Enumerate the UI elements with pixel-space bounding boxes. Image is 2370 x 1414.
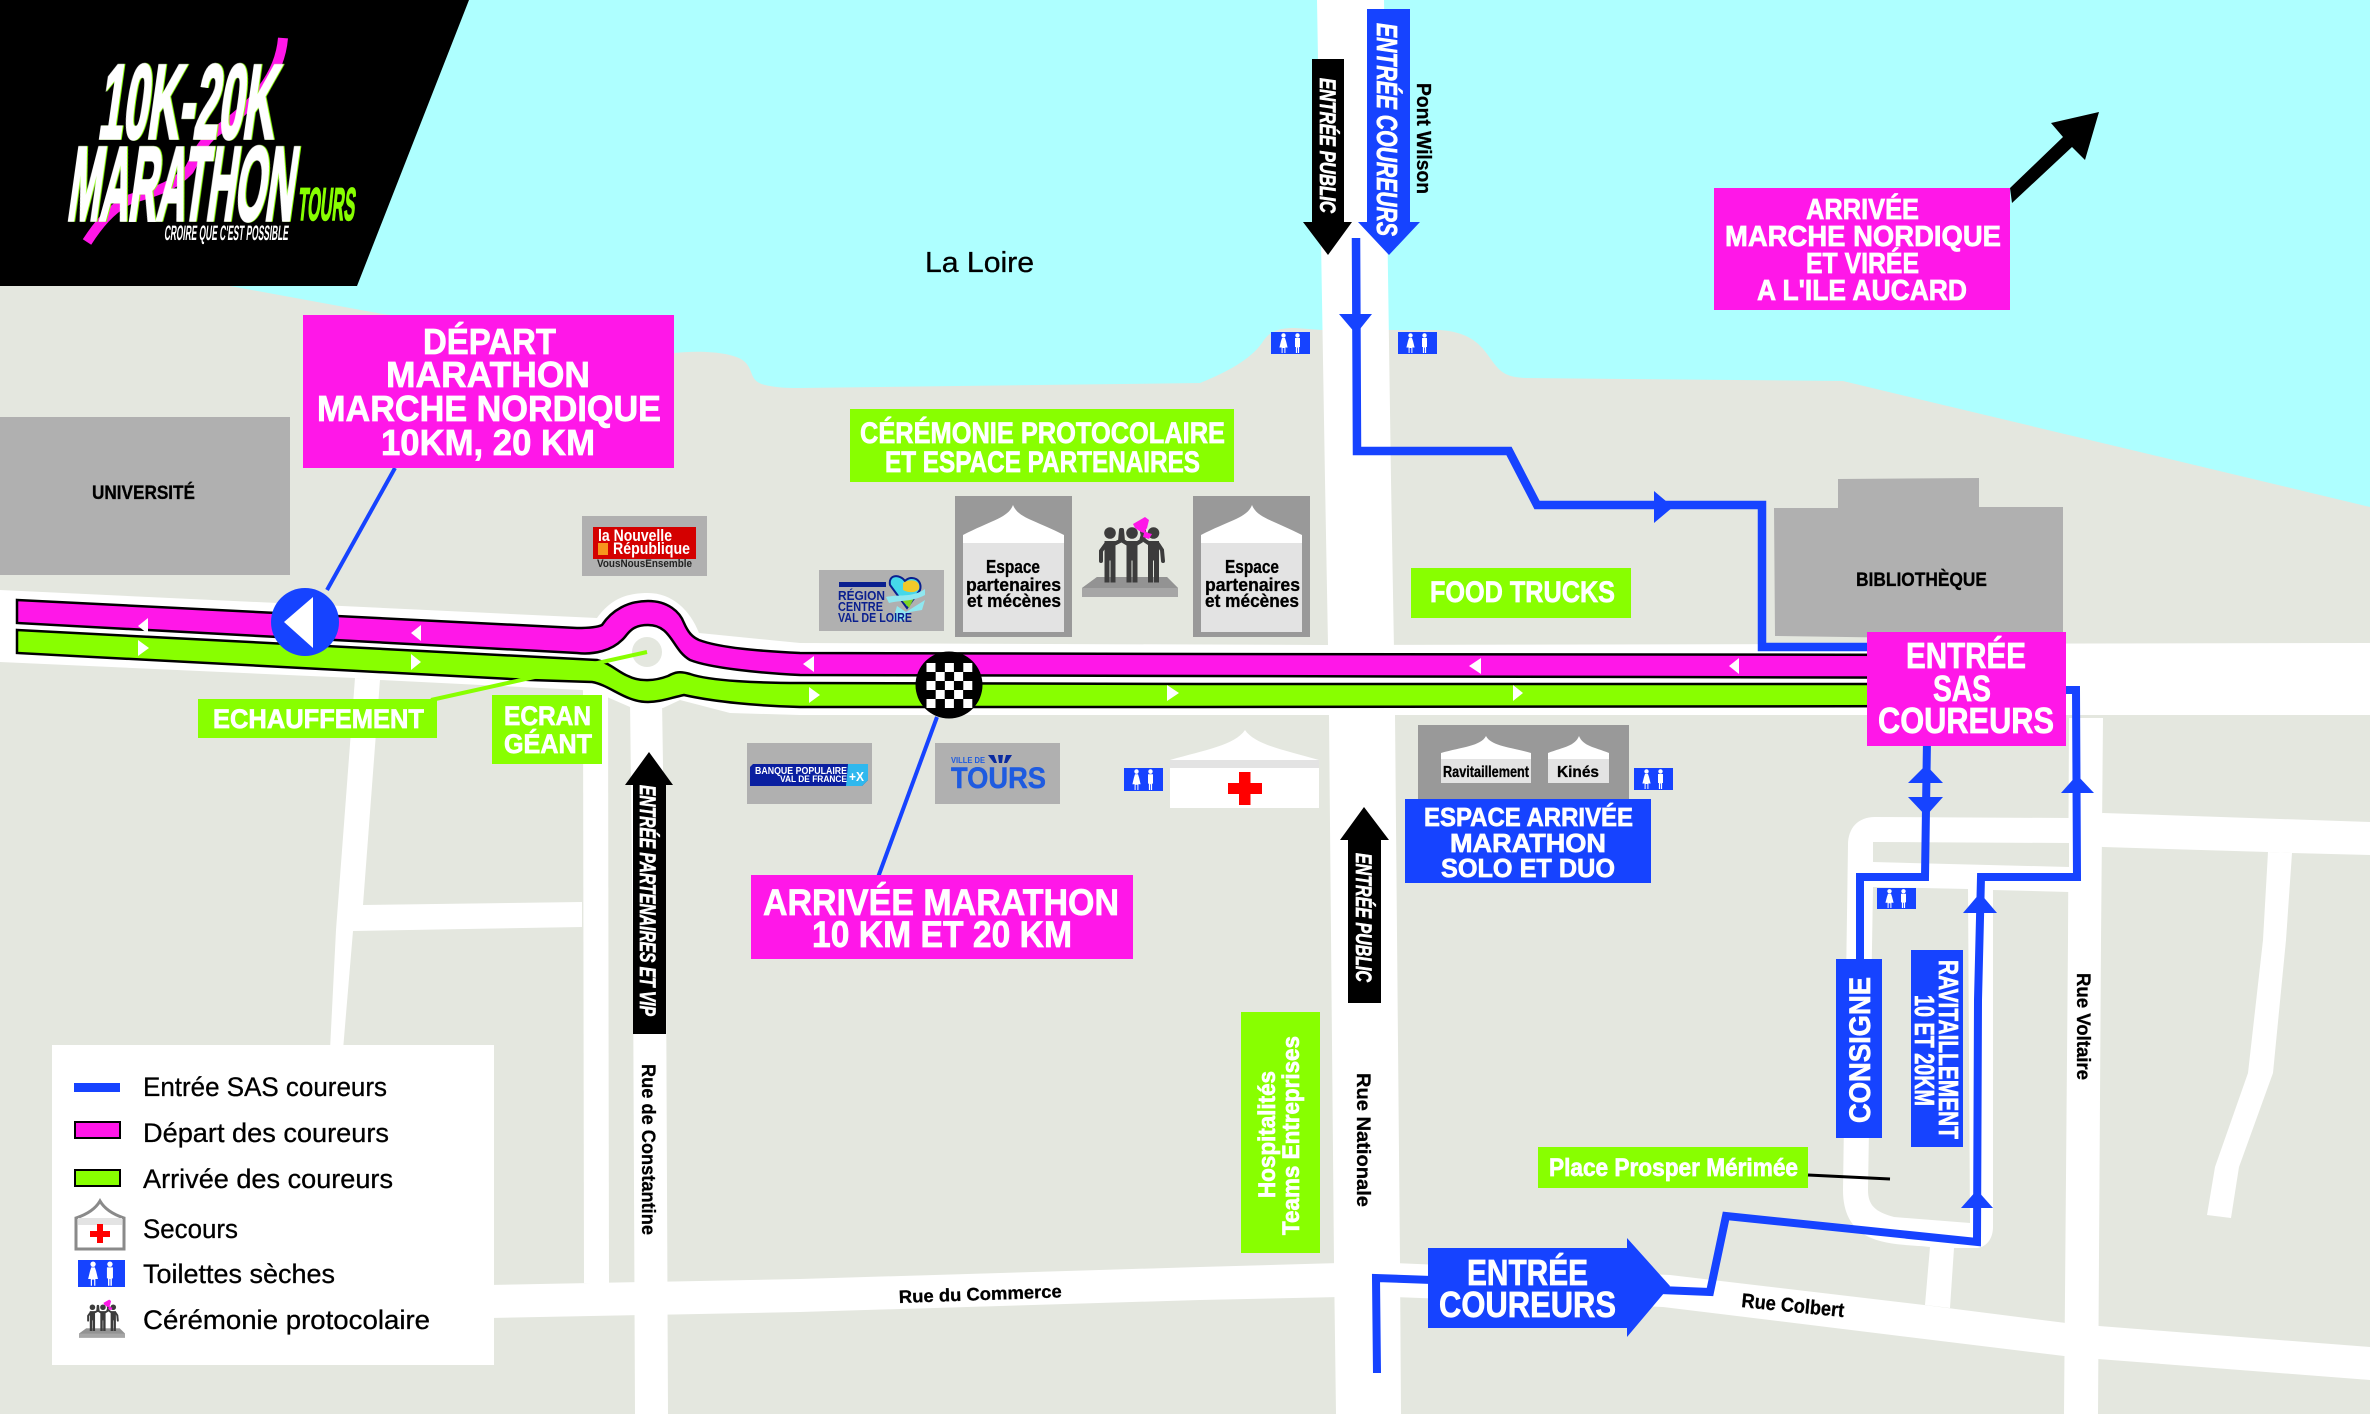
tents: ravitaillement and kinés: Ravitaillement <box>1443 764 1530 781</box>
roundabout island <box>632 637 662 667</box>
arrow: entrée coureurs from bridge: ENTRÉE COUREURS <box>1370 23 1403 236</box>
label: hospitalités: Hospitalités <box>1254 1071 1281 1198</box>
label: écran géant: GÉANT <box>504 728 592 759</box>
toilets: square <box>1877 888 1916 909</box>
label: La Loire: La Loire <box>925 247 1034 279</box>
legend icon: secours <box>76 1201 124 1249</box>
label: food trucks: FOOD TRUCKS <box>1430 576 1615 609</box>
building: université: UNIVERSITÉ <box>92 482 195 504</box>
land blocks inside square <box>1868 842 2069 1223</box>
start marker <box>271 588 339 656</box>
label: arrivée marathon: ARRIVÉE MARATHON <box>763 882 1119 923</box>
sponsor: Ville de Tours: TOURS <box>951 762 1046 795</box>
arrow: entrée public from bridge: ENTRÉE PUBLIC <box>1315 78 1340 214</box>
icon: podium ceremony <box>1082 517 1178 597</box>
label: cérémonie protocolaire <box>850 409 1234 482</box>
runner route: right side to SAS <box>1660 690 2094 1292</box>
label: espace arrivée: MARATHON <box>1450 828 1606 858</box>
label: ravitaillement 10 et 20km <box>1909 950 1964 1147</box>
label: arrivée marathon: 10 KM ET 20 KM <box>812 914 1072 955</box>
track: départ magenta <box>17 600 2060 678</box>
tent: espace partenaires 1 <box>955 496 1072 637</box>
track direction arrows <box>138 618 1739 703</box>
sponsor: Banque Populaire: +X <box>849 769 864 784</box>
legend text: cérémonie: Cérémonie protocolaire <box>143 1305 430 1335</box>
label: entrée sas coureurs <box>1867 632 2066 746</box>
arrow: to ile aucard <box>2010 112 2099 203</box>
label: arrivée marathon <box>751 875 1133 959</box>
leader line: arrivée <box>877 717 937 880</box>
runner route: consigne to SAS <box>1860 740 1943 960</box>
label: espace arrivée <box>1405 799 1651 883</box>
tent: espace partenaires 2: et mécènes <box>1205 591 1299 611</box>
street: Rue Colbert: Rue Colbert <box>1741 1290 1845 1322</box>
track: arrivée green <box>17 630 2060 707</box>
label: départ marathon <box>303 315 674 468</box>
tent: espace partenaires 1: Espace <box>986 557 1040 577</box>
legend text: arrivée: Arrivée des coureurs <box>143 1164 393 1194</box>
sponsor: La Nouvelle République: la Nouvelle <box>598 526 672 545</box>
arrow: entrée public from bridge <box>1303 59 1352 255</box>
logo panel: MARATHON <box>63 125 305 243</box>
sponsor: Région Centre Val de Loire: RÉGION <box>838 588 885 603</box>
sponsor: La Nouvelle République: République <box>613 539 690 558</box>
label: entrée sas coureurs: ENTRÉE <box>1906 635 2026 676</box>
legend swatch: arrivée <box>75 1170 120 1186</box>
legend icon: toilettes <box>78 1260 125 1287</box>
arrow: entrée coureurs <box>1428 1238 1670 1337</box>
street: Rue Voltaire: Rue Voltaire <box>2072 973 2093 1080</box>
street: Rue du Commerce: Rue du Commerce <box>898 1281 1062 1307</box>
label: arrivée marche nordique <box>1714 188 2010 310</box>
tent: espace partenaires 2: Espace <box>1225 557 1279 577</box>
label: food trucks <box>1411 568 1631 618</box>
street: Rue de Constantine: Rue de Constantine <box>637 1064 658 1235</box>
label: hospitalités <box>1241 1012 1320 1253</box>
label: espace arrivée: ESPACE ARRIVÉE <box>1424 802 1633 832</box>
tent: espace partenaires 1: partenaires <box>966 575 1061 595</box>
legend text: toilettes: Toilettes sèches <box>143 1259 335 1289</box>
sponsor: Banque Populaire <box>747 743 872 804</box>
arrow: entrée public south <box>1340 807 1389 1003</box>
toilets: near first aid <box>1124 768 1163 791</box>
arrow: entrée partenaires et VIP: ENTRÉE PARTENAIRES ET VIP <box>635 785 660 1016</box>
label: entrée sas coureurs: COUREURS <box>1878 700 2054 741</box>
toilets: bridge left <box>1271 332 1310 354</box>
label: arrivée marche nordique: MARCHE NORDIQUE <box>1725 221 2001 253</box>
legend swatch: entrée SAS <box>74 1083 120 1092</box>
label: échauffement: ECHAUFFEMENT <box>213 704 424 734</box>
sponsor: Banque Populaire: BANQUE POPULAIRE <box>755 766 847 777</box>
tent: espace partenaires 1: et mécènes <box>967 591 1061 611</box>
leader line: échauffement <box>431 652 647 700</box>
sponsor: La Nouvelle République <box>582 516 707 576</box>
building: bibliothèque <box>1774 478 2063 640</box>
arrow: entrée coureurs from bridge <box>1358 9 1420 255</box>
label: départ marathon: 10KM, 20 KM <box>381 422 595 463</box>
arrow: entrée public south: ENTRÉE PUBLIC <box>1351 853 1376 983</box>
arrow: entrée coureurs: COUREURS <box>1439 1284 1616 1325</box>
sponsor: Ville de Tours: VILLE DE <box>951 756 986 765</box>
sponsor: Banque Populaire: VAL DE FRANCE <box>780 774 847 784</box>
legend icon: cérémonie <box>79 1300 125 1338</box>
building: université <box>0 417 290 575</box>
label: écran géant: ECRAN <box>504 701 591 731</box>
legend panel <box>52 1045 494 1365</box>
toilets: bridge right <box>1398 332 1437 354</box>
label: départ marathon: DÉPART <box>423 321 556 362</box>
label: cérémonie protocolaire: ET ESPACE PARTENAIRES <box>885 446 1200 479</box>
tent: espace partenaires 2 <box>1193 496 1310 637</box>
sponsor: La Nouvelle République: VousNousEnsemble <box>597 558 692 570</box>
runner route: from bridge to SAS <box>1339 238 1870 647</box>
label: écran géant <box>492 695 602 764</box>
label: consigne: CONSIGNE <box>1844 977 1877 1123</box>
sponsor: Région Centre Val de Loire: CENTRE <box>838 599 883 614</box>
label: arrivée marche nordique: ET VIRÉE <box>1806 246 1919 280</box>
logo panel: 10K-20K <box>94 43 286 161</box>
logo panel: CROIRE QUE C'EST POSSIBLE <box>163 222 290 245</box>
label: arrivée marche nordique: A L'ILE AUCARD <box>1757 275 1967 307</box>
arrow: entrée coureurs: ENTRÉE <box>1467 1252 1588 1293</box>
label: ravitaillement 10 et 20km: RAVITAILLEMENT <box>1933 960 1964 1139</box>
building: bibliothèque: BIBLIOTHÈQUE <box>1856 569 1987 591</box>
legend text: départ: Départ des coureurs <box>143 1118 389 1148</box>
legend text: secours: Secours <box>143 1214 238 1244</box>
label: cérémonie protocolaire: CÉRÉMONIE PROTOCOLAIRE <box>860 416 1225 450</box>
tents: ravitaillement and kinés <box>1418 725 1629 799</box>
tent: espace partenaires 2: partenaires <box>1205 575 1300 595</box>
tent: first aid <box>1170 730 1319 808</box>
label: consigne <box>1836 959 1882 1138</box>
label: place prosper mérimée <box>1538 1147 1890 1188</box>
logo panel: TOURS <box>296 178 358 230</box>
label: entrée sas coureurs: SAS <box>1933 668 1991 709</box>
river: La Loire water <box>0 0 2370 507</box>
street: Rue Nationale: Rue Nationale <box>1352 1073 1373 1207</box>
legend swatch: départ <box>75 1122 120 1138</box>
label: ravitaillement 10 et 20km: 10 ET 20KM <box>1909 995 1940 1106</box>
arrow: entrée partenaires et VIP <box>625 752 673 1034</box>
tents: ravitaillement and kinés: Kinés <box>1557 764 1599 781</box>
runner route: rue nationale to arrow <box>1376 1278 1432 1373</box>
label: départ marathon: MARCHE NORDIQUE <box>317 388 661 429</box>
sponsor: Région Centre Val de Loire: VAL DE LOIRE <box>838 610 912 625</box>
toilets: near kinés <box>1634 768 1673 790</box>
finish marker: checkered flag <box>916 652 982 718</box>
street: Pont Wilson: Pont Wilson <box>1412 83 1434 194</box>
sponsor: Région Centre Val de Loire <box>819 570 944 631</box>
leader line: départ <box>327 468 395 590</box>
label: hospitalités: Teams Entreprises <box>1278 1036 1305 1235</box>
label: départ marathon: MARATHON <box>386 354 590 395</box>
sponsor: Ville de Tours <box>935 743 1060 804</box>
label: arrivée marche nordique: ARRIVÉE <box>1806 192 1919 226</box>
label: place prosper mérimée: Place Prosper Mérimée <box>1549 1154 1798 1182</box>
logo panel <box>0 0 469 286</box>
legend text: entrée SAS: Entrée SAS coureurs <box>143 1072 387 1102</box>
label: espace arrivée: SOLO ET DUO <box>1441 853 1615 883</box>
